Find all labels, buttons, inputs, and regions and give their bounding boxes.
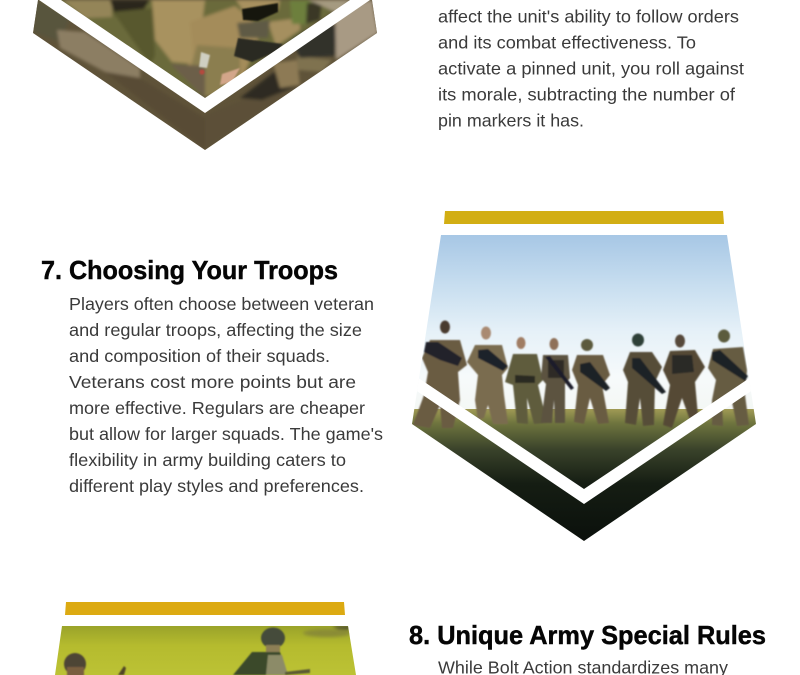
gold bar above troops photo: [444, 211, 724, 224]
body text: choosing your troops: Players often choose between veteran: [69, 294, 374, 314]
body text: pinned units: and its combat effectiveness. To: [438, 32, 696, 52]
body text: pinned units: affect the unit's ability to follow orders: [438, 6, 739, 26]
soldier 7: [663, 334, 705, 428]
heading: 7. Choosing Your Troops: 7. Choosing Your Troops: [41, 255, 338, 285]
photo: soldiers on yellow-green field: [50, 626, 360, 675]
white chevron stripe: [39, 0, 370, 113]
photo: prone soldier in chevron frame: [30, 0, 380, 152]
body text: choosing your troops: but allow for larger squads. The game's: [69, 424, 383, 444]
soldier 4: [541, 338, 574, 423]
body text: choosing your troops: and composition of their squads.: [69, 346, 330, 366]
photo: squad of eight soldiers in chevron frame: [405, 235, 765, 545]
heading: 8. Unique Army Special Rules: 8. Unique Army Special Rules: [409, 620, 766, 650]
soldier 8: [708, 330, 749, 426]
body text: pinned units: its morale, subtracting the number of: [438, 84, 735, 104]
soldier 5: [572, 339, 610, 424]
soldier 3: [505, 337, 547, 424]
body text: choosing your troops: [69, 294, 383, 496]
soldier 6: [623, 334, 666, 426]
soldier area above chevron: [62, 0, 332, 94]
body text: pinned units: pin markers it has.: [438, 110, 584, 130]
body text: pinned units: [438, 6, 744, 130]
body text: choosing your troops: flexibility in army building caters to: [69, 450, 346, 470]
soldier 1: [413, 320, 467, 428]
body text: choosing your troops: different play styles and preferences.: [69, 476, 364, 496]
body text: choosing your troops: more effective. Regulars are cheaper: [69, 398, 365, 418]
soldier 2: [467, 326, 508, 424]
body text: choosing your troops: Veterans cost more points but are: [69, 372, 356, 392]
body text: pinned units: activate a pinned unit, you roll against: [438, 58, 744, 78]
gold bar above third photo: [65, 602, 345, 615]
body text: choosing your troops: and regular troops, affecting the size: [69, 320, 362, 340]
